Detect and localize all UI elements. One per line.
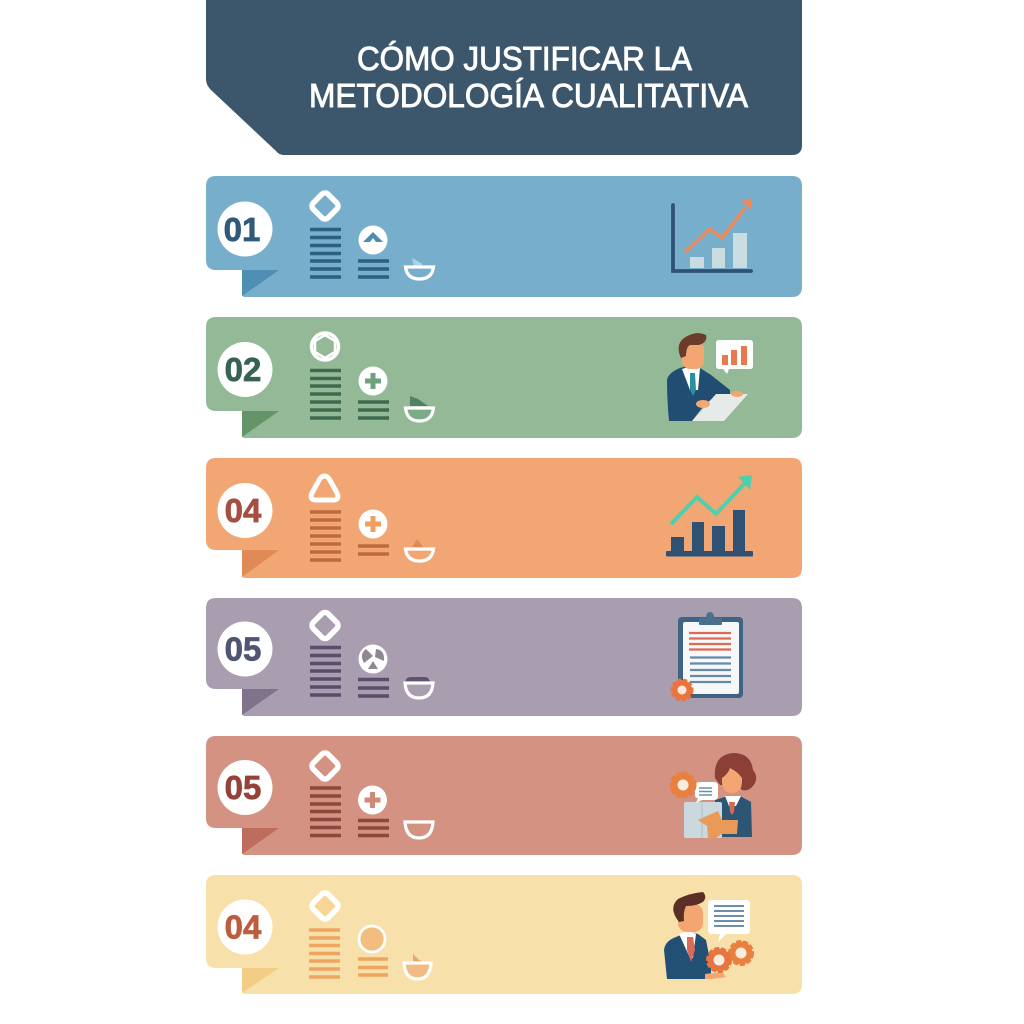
panel 4: purple step 05 <box>206 598 802 716</box>
icon: diamond with text lines <box>309 891 340 977</box>
icon: diamond with text lines <box>310 611 341 695</box>
number badge 02 <box>218 342 272 397</box>
header banner <box>206 0 802 155</box>
number badge 01 <box>218 202 272 256</box>
icon: clipboard with gear <box>672 612 743 700</box>
icon: triangle with text lines <box>310 476 341 560</box>
number badge 01: 01 <box>224 211 260 248</box>
title: METODOLOGÍA CUALITATIVA <box>309 78 749 115</box>
icon: bar chart with teal arrow <box>666 475 753 556</box>
icon: bowl <box>406 539 434 561</box>
icon: bowl <box>404 954 431 979</box>
icon: bowl <box>406 258 434 279</box>
number badge 05 <box>218 622 272 676</box>
icon: diamond with text lines <box>310 191 341 277</box>
number badge 04: 04 <box>225 492 262 529</box>
icon: hexagon with text lines <box>310 333 341 418</box>
panel 2: green step 02 <box>206 317 802 438</box>
panel 6: yellow step 04 <box>206 875 802 994</box>
icon: upward symbol with text lines <box>358 226 389 277</box>
panel 1: blue step 01 <box>206 176 802 297</box>
icon: bowl <box>406 396 434 421</box>
icon: diamond with text lines <box>310 751 341 836</box>
icon: businessman with chart bubble <box>667 333 753 421</box>
number badge 04: 04 <box>225 908 262 946</box>
number badge 04 <box>218 483 272 538</box>
icon: plus with text lines <box>358 786 389 836</box>
title <box>309 40 749 115</box>
number badge 05: 05 <box>225 630 261 668</box>
title: CÓMO JUSTIFICAR LA <box>357 40 693 78</box>
number badge 05 <box>218 760 272 815</box>
panel 5: rose step 05 <box>206 736 802 855</box>
panel 3: orange step 04 <box>206 458 802 578</box>
icon: fan with text lines <box>358 644 389 696</box>
icon: plus with text lines <box>358 510 389 554</box>
number badge 02: 02 <box>225 351 261 388</box>
icon: rising line chart <box>673 198 752 271</box>
icon: hexagon with text lines <box>358 926 388 975</box>
icon: businessman with speech bubble and gears <box>664 892 752 979</box>
number badge 05: 05 <box>225 769 261 806</box>
icon: bowl <box>405 677 433 698</box>
icon: bowl <box>405 822 433 838</box>
icon: plus with text lines <box>358 366 389 418</box>
number badge 04 <box>218 900 272 954</box>
icon: businesswoman with box and gear <box>671 753 756 838</box>
